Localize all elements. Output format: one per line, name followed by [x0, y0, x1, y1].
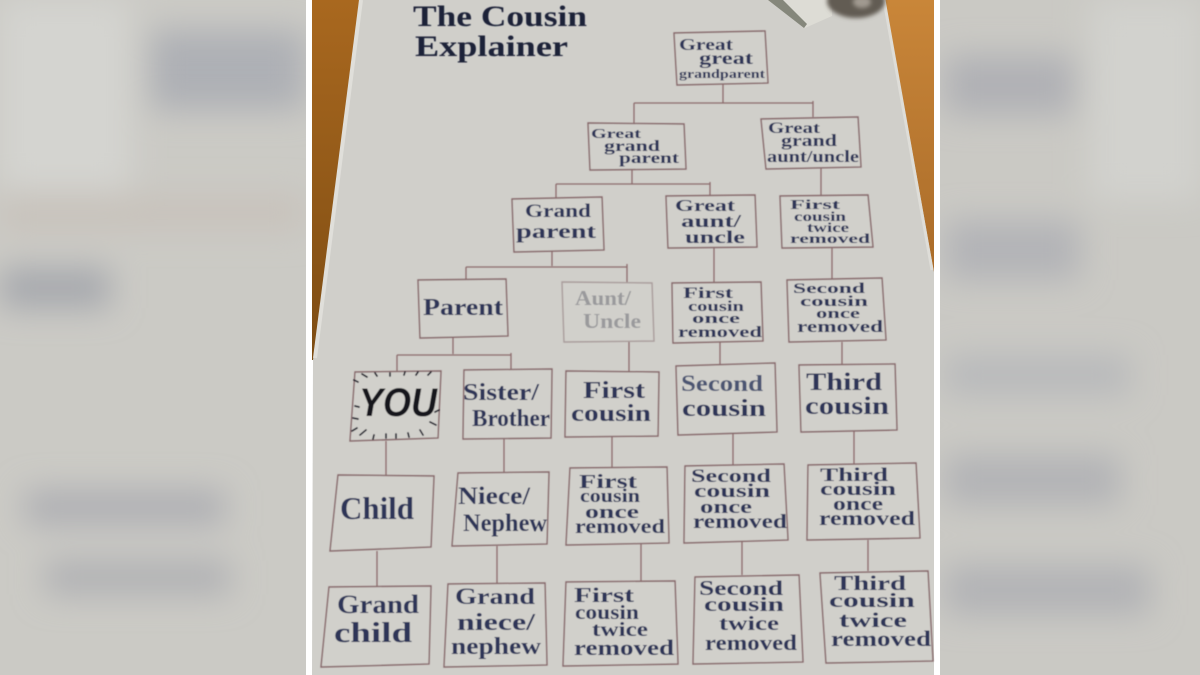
box: great great grandparent [674, 31, 768, 85]
box: grand child [321, 586, 431, 667]
box: second cousin twice removed: Second [699, 576, 783, 600]
box: third cousin: Third [806, 369, 882, 396]
box: grand niece/nephew: nephew [451, 634, 542, 660]
box: great great grandparent: great [699, 48, 753, 68]
box: great aunt/uncle: aunt/ [681, 211, 742, 231]
box: grand niece/nephew: Grand [455, 584, 535, 609]
box: great great grandparent: grandparent [679, 66, 766, 81]
box: second cousin once removed [684, 464, 788, 543]
box: second cousin once removed (upper) [787, 278, 886, 342]
box: great grandparent: parent [619, 150, 680, 167]
box: second cousin twice removed: removed [705, 630, 797, 655]
box: great grandparent: Great [591, 127, 641, 142]
box: grand parent [512, 197, 604, 252]
box: third cousin twice removed: removed [831, 626, 931, 651]
box: second cousin twice removed: twice [719, 613, 779, 635]
box: grand child: child [334, 618, 413, 649]
box: grand parent: Grand [525, 201, 592, 222]
box: third cousin once removed [807, 463, 920, 540]
box: first cousin once removed: First [579, 471, 637, 493]
box: first cousin once removed (upper) [672, 282, 763, 343]
box: third cousin twice removed: Third [834, 571, 906, 595]
box: first cousin twice removed: cousin [575, 602, 639, 624]
object at top of towel: paper corner and stone [768, 0, 885, 28]
box: third cousin once removed: once [833, 494, 883, 515]
box: first cousin once removed (upper): First [683, 285, 734, 302]
box: great grand aunt/uncle [761, 117, 861, 169]
box: second cousin once removed: Second [691, 466, 772, 487]
box: third cousin once removed: removed [819, 508, 915, 530]
box: aunt/uncle (faded) [562, 282, 654, 342]
box: sister/brother [463, 369, 552, 439]
box: first cousin twice removed (upper) [780, 195, 873, 248]
box: grand niece/nephew: niece/ [457, 610, 535, 636]
box: child: Child [340, 490, 414, 526]
box: parent [418, 279, 508, 338]
box: first cousin: cousin [571, 401, 651, 427]
box: third cousin once removed: Third [820, 465, 889, 486]
wood table right [880, 0, 934, 290]
box: second cousin once removed (upper): Second [793, 281, 866, 297]
box: first cousin twice removed (upper): removed [790, 232, 870, 247]
box: first cousin once removed [566, 467, 669, 545]
box: second cousin twice removed [693, 575, 803, 664]
box: first cousin once removed: removed [575, 516, 665, 538]
box: third cousin twice removed [820, 571, 933, 663]
box: third cousin once removed: cousin [820, 479, 897, 500]
box: first cousin twice removed (upper): twice [807, 221, 849, 236]
box: first cousin once removed (upper): once [692, 311, 741, 327]
photo frame [306, 0, 940, 675]
box: second cousin [676, 363, 777, 435]
box: parent: Parent [423, 295, 503, 321]
box: first cousin twice removed: twice [592, 619, 648, 641]
box: second cousin once removed: cousin [694, 481, 771, 502]
blurred right background panel [940, 0, 1200, 675]
box: YOU with burst marks: YOU [359, 381, 438, 425]
box: first cousin twice removed [563, 581, 678, 666]
box: second cousin: Second [681, 371, 763, 396]
box: niece/nephew: Nephew [463, 510, 547, 537]
box: YOU with burst marks [350, 371, 441, 441]
tea towel paper [312, 0, 934, 675]
box: third cousin twice removed: cousin [829, 590, 915, 612]
box: first cousin twice removed (upper): cousin [794, 210, 846, 225]
box: great grand aunt/uncle: aunt/uncle [767, 147, 860, 166]
box: first cousin once removed (upper): removed [678, 324, 762, 341]
box: aunt/uncle (faded): Aunt/ [575, 286, 632, 310]
box: sister/brother: Brother [472, 406, 550, 432]
box: great aunt/uncle: Great [675, 196, 735, 215]
box: great grand aunt/uncle: Great [768, 120, 821, 137]
box: second cousin once removed (upper): once [816, 306, 860, 322]
box: great grandparent [588, 123, 686, 170]
box: sister/brother: Sister/ [463, 380, 539, 406]
box: grand niece/nephew [444, 583, 547, 667]
box: second cousin once removed (upper): cousin [800, 294, 869, 310]
box: first cousin [565, 371, 659, 437]
box: great aunt/uncle [666, 195, 757, 248]
connector lines [377, 84, 868, 586]
box: niece/nephew: Niece/ [458, 483, 531, 510]
box: first cousin once removed: once [585, 502, 639, 523]
box: first cousin once removed (upper): cousin [688, 299, 745, 315]
box: third cousin twice removed: twice [839, 608, 907, 632]
title [413, 0, 587, 63]
box: first cousin twice removed: removed [574, 635, 674, 660]
box: aunt/uncle (faded): Uncle [583, 309, 641, 333]
box: great aunt/uncle: uncle [685, 227, 745, 247]
box: first cousin twice removed (upper): First [790, 198, 841, 213]
box: great great grandparent: Great [679, 35, 733, 54]
box: first cousin twice removed: First [574, 583, 634, 607]
box: grand parent: parent [516, 221, 596, 243]
box: great grand aunt/uncle: grand [781, 131, 838, 150]
box: first cousin: First [583, 378, 645, 404]
box: third cousin: cousin [805, 393, 889, 420]
box: grand child: Grand [337, 590, 420, 619]
box: second cousin once removed (upper): removed [797, 317, 884, 336]
box: second cousin once removed: removed [693, 511, 787, 533]
box: second cousin once removed: once [700, 497, 752, 518]
box: third cousin [799, 364, 897, 432]
box: second cousin: cousin [682, 396, 766, 422]
title: The Cousin [413, 0, 587, 33]
box: first cousin once removed: cousin [580, 486, 640, 507]
box: great grandparent: grand [604, 138, 660, 155]
blurred left background panel [0, 0, 306, 675]
box: child [330, 475, 434, 551]
title: Explainer [415, 30, 568, 63]
wood table left [312, 0, 372, 360]
box: niece/nephew [452, 472, 549, 546]
box: second cousin twice removed: cousin [704, 594, 784, 616]
